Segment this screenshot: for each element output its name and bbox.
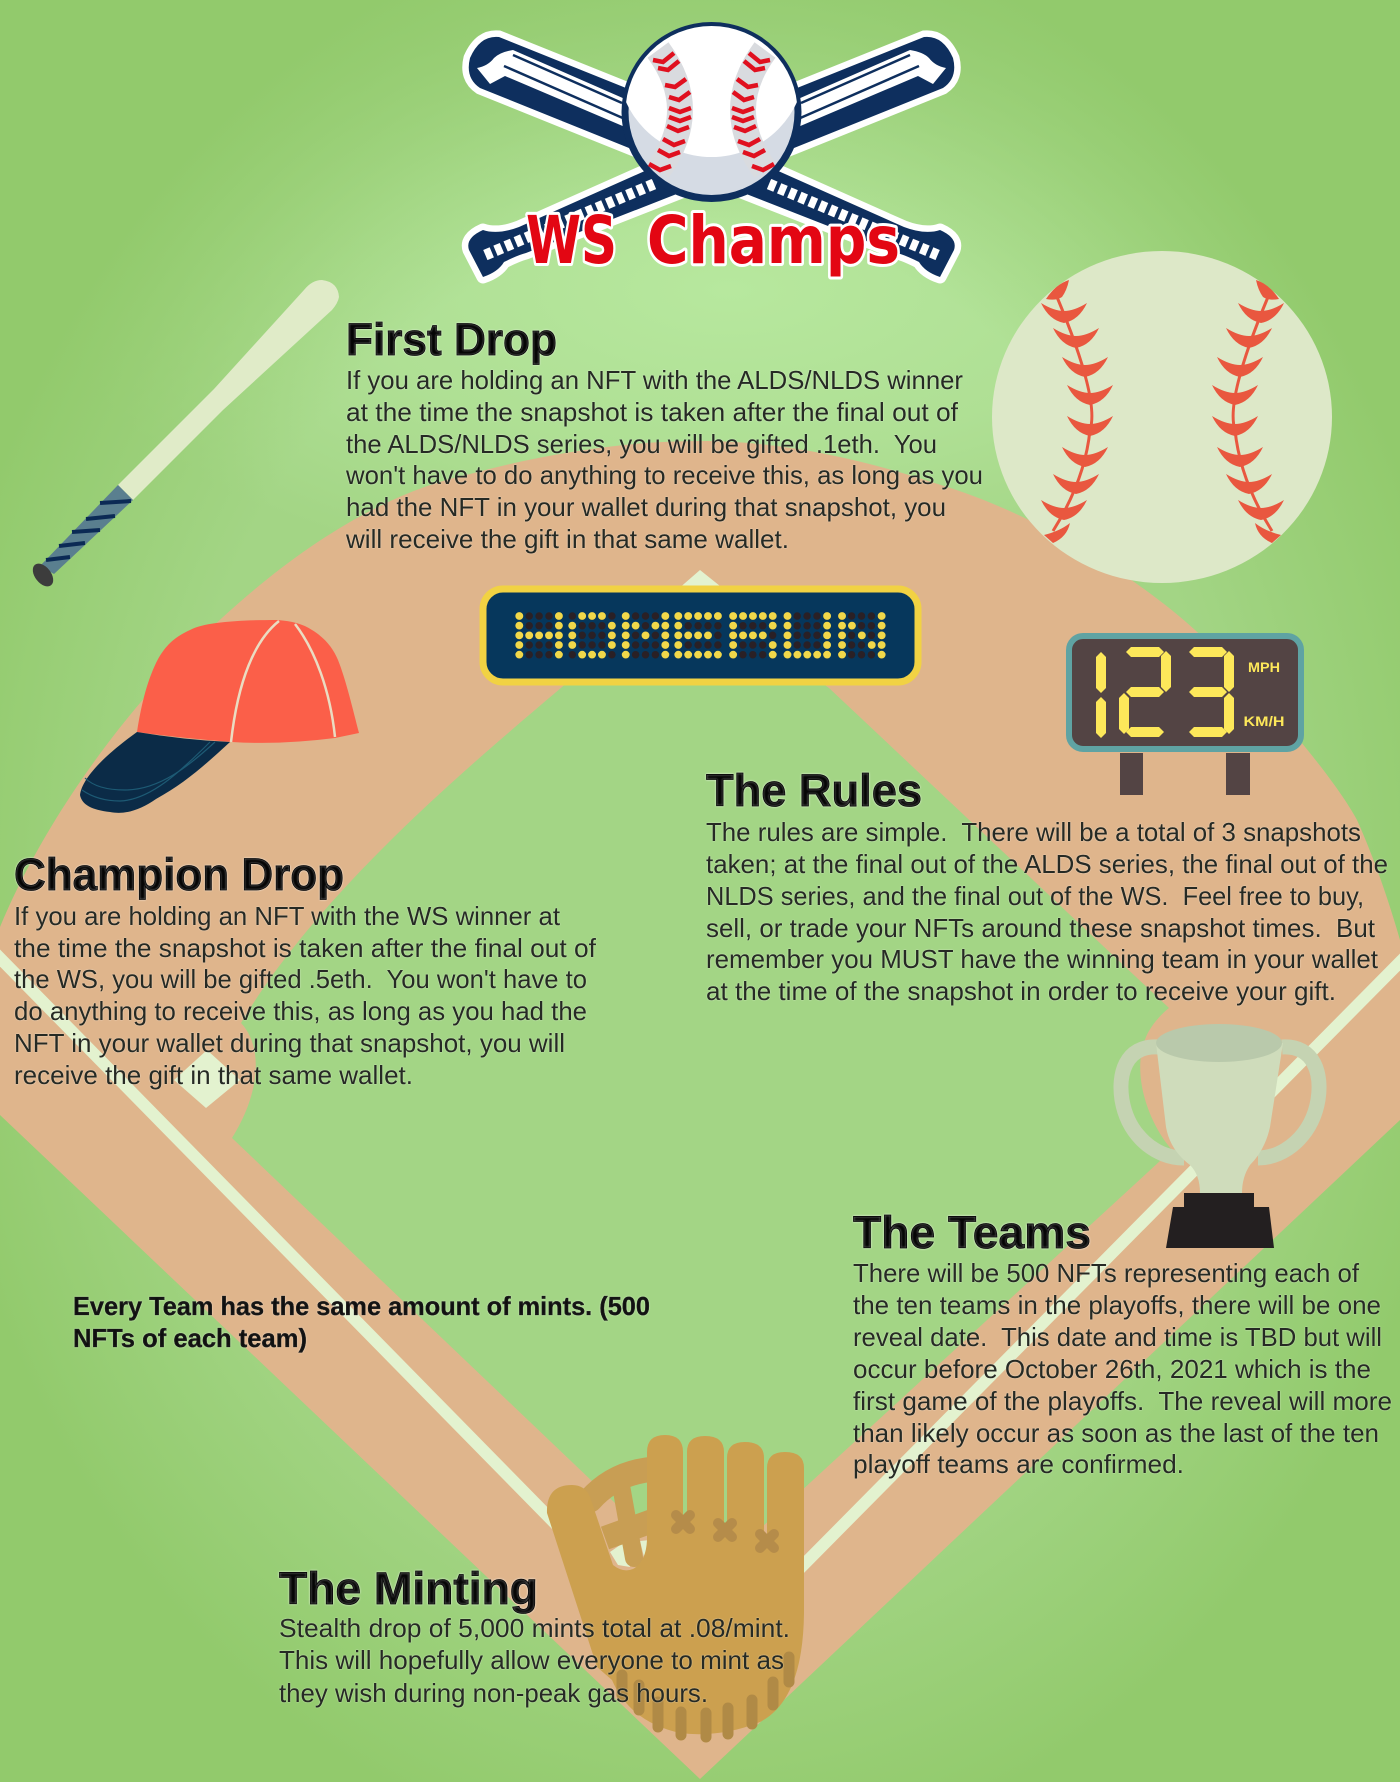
heading: First Drop: First Drop xyxy=(346,314,557,365)
text block: The Minting xyxy=(279,1613,790,1708)
left seam and stitches xyxy=(1041,280,1113,543)
text block: The Teams: playoff teams are confirmed. xyxy=(853,1449,1184,1479)
note: every team has the same mints xyxy=(73,1291,650,1353)
seam bands xyxy=(658,50,765,170)
sign posts xyxy=(1120,753,1250,795)
text block: Champion Drop: receive the gift in that same wallet. xyxy=(14,1060,413,1090)
text block: The Minting: they wish during non-peak gas hours. xyxy=(279,1678,708,1708)
icon: large baseball xyxy=(992,251,1332,583)
knob xyxy=(29,560,57,590)
webbing vertical lace xyxy=(620,1480,634,1558)
text block: Champion Drop: If you are holding an NFT with the WS winner at xyxy=(14,901,561,931)
seven-segment digits 123 xyxy=(1096,647,1234,738)
bat pointing lower right xyxy=(469,37,955,277)
logo wordmark: WS xyxy=(526,202,617,279)
finger knuckle stitches xyxy=(676,1515,774,1548)
text block: Champion Drop: do anything to receive this, as long as you had the xyxy=(14,996,587,1026)
text block: First Drop: If you are holding an NFT with the ALDS/NLDS winner xyxy=(346,365,963,395)
text block: The Rules xyxy=(706,817,1388,1006)
text block: First Drop: won't have to do anything to receive this, as long as you xyxy=(345,460,983,490)
trophy base xyxy=(1166,1193,1274,1248)
barrel xyxy=(118,280,339,500)
text block: The Teams xyxy=(853,1258,1392,1479)
heading: The Rules: The Rules xyxy=(706,765,922,816)
left foul line xyxy=(0,952,640,1610)
webbing bands xyxy=(590,1469,655,1500)
heading: The Minting: The Minting xyxy=(279,1563,538,1614)
right foul line xyxy=(745,956,1400,1624)
icon: speed sign xyxy=(1069,636,1301,795)
logo wordmark: Champs xyxy=(647,202,900,279)
trophy cup xyxy=(1156,1043,1283,1193)
text block: The Teams: There will be 500 NFTs representing each of xyxy=(853,1258,1360,1288)
baseball diamond dirt field xyxy=(0,441,1400,1779)
glove palm and fingers xyxy=(547,1435,804,1734)
icon: trophy xyxy=(1121,1024,1319,1248)
sign panel xyxy=(1069,636,1301,749)
text block: The Rules: at the time of the snapshot in order to receive your gift. xyxy=(706,976,1336,1006)
text block: First Drop: had the NFT in your wallet during that snapshot, you xyxy=(346,492,946,522)
cup rim xyxy=(1156,1024,1282,1062)
text block: First Drop: at the time the snapshot is taken after the final out of xyxy=(346,397,959,427)
unit labels: KM/H xyxy=(1244,713,1284,729)
text block: Champion Drop xyxy=(14,901,597,1090)
text block: First Drop xyxy=(345,365,983,554)
grip tape left xyxy=(483,184,654,256)
bat pointing lower left xyxy=(468,37,954,277)
text block: The Minting: This will hopefully allow everyone to mint as xyxy=(279,1645,784,1675)
brim lines xyxy=(82,742,215,801)
text block: The Rules: remember you MUST have the winning team in your wallet xyxy=(706,944,1379,974)
dark dot matrix xyxy=(519,616,882,655)
note: every team has the same mints: Every Team has the same amount of mints. (500 xyxy=(73,1291,650,1321)
text block: The Minting: Stealth drop of 5,000 mints total at .08/mint. xyxy=(279,1613,790,1643)
webbing cross band xyxy=(605,1520,655,1538)
text block: The Teams: first game of the playoffs. The reveal will more xyxy=(853,1386,1392,1416)
text block: First Drop: will receive the gift in that same wallet. xyxy=(345,524,789,554)
text block: The Teams: the ten teams in the playoffs, there will be one xyxy=(853,1290,1381,1320)
text block: The Rules: sell, or trade your NFTs around these snapshot times. But xyxy=(706,913,1376,943)
right bat highlight xyxy=(798,50,946,127)
text block: The Teams: occur before October 26th, 2021 which is the xyxy=(853,1354,1371,1384)
cap brim xyxy=(80,732,230,813)
handle xyxy=(40,485,133,574)
heading: The Teams: The Teams xyxy=(853,1207,1091,1258)
logo baseball xyxy=(622,22,802,202)
logo: WS Champs crossed bats and baseball xyxy=(468,0,955,279)
heading: Champion Drop: Champion Drop xyxy=(14,849,344,900)
left stitches xyxy=(649,53,691,170)
cap crown xyxy=(137,620,359,743)
logo wordmark xyxy=(526,202,900,279)
text block: The Rules: taken; at the final out of the ALDS series, the final out of the xyxy=(706,849,1388,879)
text block: The Rules: NLDS series, and the final out of the WS. Feel free to buy, xyxy=(706,881,1364,911)
unit labels xyxy=(1244,659,1284,729)
left bat highlight xyxy=(477,50,625,127)
left barrel line xyxy=(504,55,625,119)
text block: The Teams: reveal date. This date and time is TBD but will xyxy=(853,1322,1382,1352)
icon: cream baseball bat xyxy=(29,280,339,590)
icon: baseball glove xyxy=(547,1435,804,1737)
lower lacing xyxy=(622,1657,789,1737)
third base xyxy=(174,1050,240,1108)
text block: The Rules: The rules are simple. There will be a total of 3 snapshots xyxy=(706,817,1361,847)
scoreboard: HOMERUN xyxy=(483,589,918,682)
trophy handles xyxy=(1121,1047,1319,1158)
unit labels: MPH xyxy=(1248,659,1280,675)
cap seams xyxy=(231,621,335,742)
grip tape right xyxy=(769,184,940,256)
grip stripes xyxy=(46,501,131,560)
text block: Champion Drop: the WS, you will be gifted .5eth. You won't have to xyxy=(14,964,587,994)
text block: The Teams: than likely occur as soon as the last of the ten xyxy=(853,1418,1379,1448)
second base xyxy=(677,570,725,590)
right barrel line xyxy=(798,55,919,119)
note: every team has the same mints: NFTs of each team) xyxy=(73,1323,307,1353)
text block: Champion Drop: the time the snapshot is taken after the final out of xyxy=(14,933,597,963)
lit dots spelling HOMERUN xyxy=(519,616,882,655)
icon: baseball cap xyxy=(80,620,359,813)
text block: First Drop: the ALDS/NLDS series, you will be gifted .1eth. You xyxy=(346,429,937,459)
right stitches xyxy=(732,53,774,170)
right seam and stitches xyxy=(1212,280,1284,543)
webbing gap colours xyxy=(610,1540,650,1567)
text block: Champion Drop: NFT in your wallet during that snapshot, you will xyxy=(14,1028,565,1058)
